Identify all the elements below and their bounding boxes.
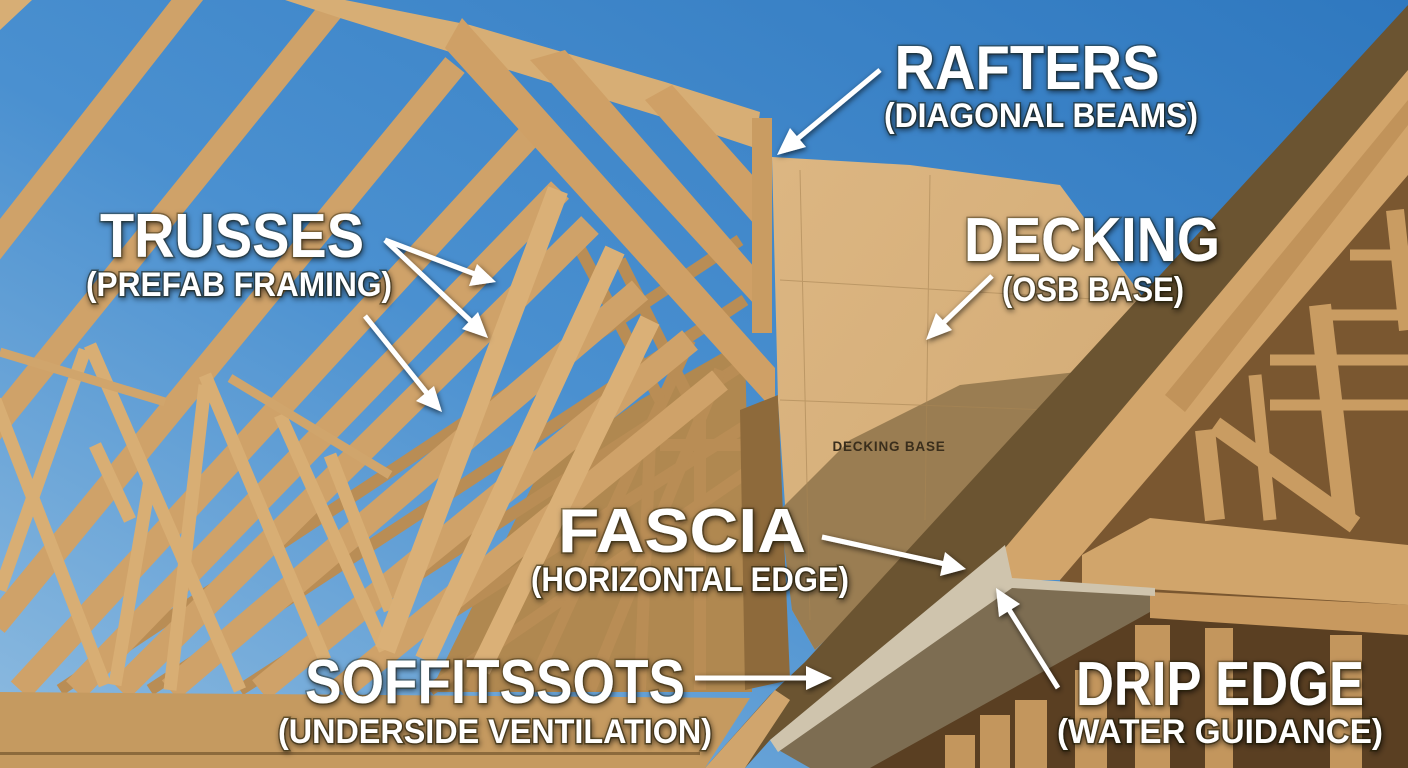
arrow: fascia (822, 537, 966, 576)
label: trusses (86, 202, 392, 304)
label: decking (964, 206, 1220, 309)
heavy rafter beams (445, 18, 775, 412)
right gable interior framing (1060, 150, 1408, 768)
soffit underside (775, 582, 1150, 768)
label: drip edge: (WATER GUIDANCE) (1057, 713, 1383, 751)
top chord (0, 0, 760, 148)
lower bracing webs (0, 345, 390, 690)
tall diagonal webs (385, 190, 650, 670)
arrow: decking (926, 276, 992, 340)
truss framing (0, 0, 755, 692)
dense far framing mass (430, 340, 752, 692)
label: rafters: RAFTERS (894, 34, 1160, 103)
label: rafters (884, 34, 1198, 135)
OSB decking panel (772, 157, 1145, 650)
far lattice webs (60, 230, 755, 690)
label: trusses: (PREFAB FRAMING) (86, 266, 392, 304)
right upper deck framing (860, 518, 1408, 768)
label: fascia: FASCIA (558, 497, 806, 566)
vertical post and gable edge (740, 118, 790, 690)
fascia trim (770, 545, 1155, 752)
bottom horizontal beam (0, 690, 790, 768)
label: soffits: (UNDERSIDE VENTILATION) (278, 713, 712, 751)
label: soffits (278, 648, 712, 751)
arrows: trusses (365, 240, 496, 412)
thin horizontal tie (0, 352, 390, 475)
arrow: drip edge (996, 588, 1058, 688)
label: decking: (OSB BASE) (1002, 271, 1184, 309)
right roof slope (705, 5, 1408, 768)
main sloped chords (0, 0, 720, 690)
label: soffits: SOFFITSSOTS (305, 648, 685, 717)
label: rafters: (DIAGONAL BEAMS) (884, 97, 1198, 135)
label: drip edge (1057, 650, 1383, 751)
label: trusses: TRUSSES (100, 202, 364, 271)
dark underside behind posts (860, 608, 1408, 768)
arrow: soffits (695, 666, 832, 690)
label: fascia (531, 497, 849, 599)
decking shadow (780, 370, 1095, 650)
label: fascia: (HORIZONTAL EDGE) (531, 561, 849, 599)
label: drip edge: DRIP EDGE (1076, 650, 1364, 719)
arrow: rafters (777, 70, 880, 155)
label: decking: DECKING (964, 206, 1220, 275)
printed panel text: DECKING BASE (832, 439, 946, 454)
